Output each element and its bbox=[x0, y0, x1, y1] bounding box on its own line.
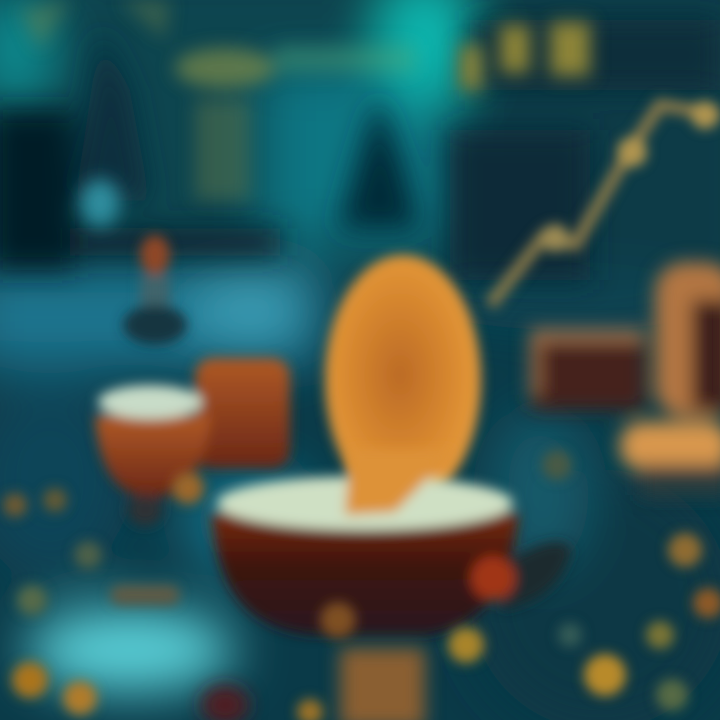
small figure on left bbox=[123, 235, 187, 345]
stem below bowl bbox=[201, 648, 425, 720]
light glow bbox=[80, 179, 120, 227]
right cup and tall shape bbox=[530, 262, 720, 495]
main bowl bbox=[212, 450, 572, 635]
central amber egg bbox=[325, 255, 481, 505]
blurred title bbox=[20, 0, 590, 200]
dark silhouettes bbox=[0, 20, 720, 280]
amber bokeh dots bbox=[3, 450, 720, 720]
amber trend line bbox=[490, 101, 720, 305]
left cups bbox=[95, 358, 290, 526]
